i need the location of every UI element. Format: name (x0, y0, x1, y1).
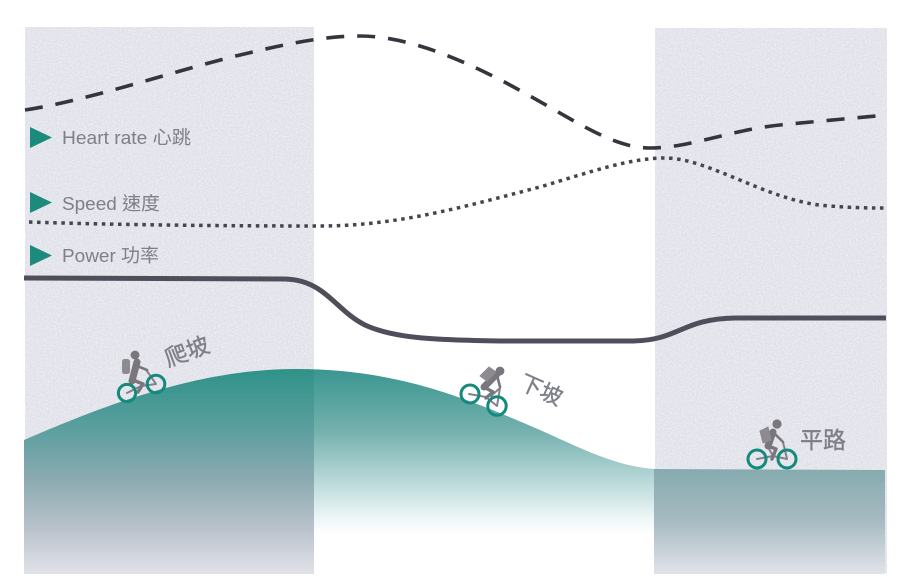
power line (24, 278, 886, 341)
panel: climbing zone background (25, 27, 314, 573)
panel: flat road zone background (655, 28, 887, 573)
legend: heart rate (30, 127, 191, 148)
heart rate line (25, 36, 887, 148)
label: descending: 下坡 (516, 370, 566, 410)
icon: climbing cyclist (118, 351, 165, 402)
icon: flat road cyclist (748, 419, 796, 468)
icon: power marker (30, 245, 52, 266)
label: climbing: 爬坡 (161, 332, 213, 372)
terrain profile (24, 360, 886, 574)
legend: power (30, 245, 159, 266)
icon: heart rate marker (30, 127, 52, 148)
icon: speed marker (30, 192, 52, 213)
label: speed: Speed 速度 (62, 193, 160, 214)
speed line (29, 158, 887, 226)
label: flat road: 平路 (800, 427, 846, 453)
legend: speed (30, 192, 160, 214)
label: power: Power 功率 (62, 245, 159, 266)
label: heart rate: Heart rate 心跳 (62, 127, 191, 148)
icon: descending cyclist (461, 367, 506, 415)
